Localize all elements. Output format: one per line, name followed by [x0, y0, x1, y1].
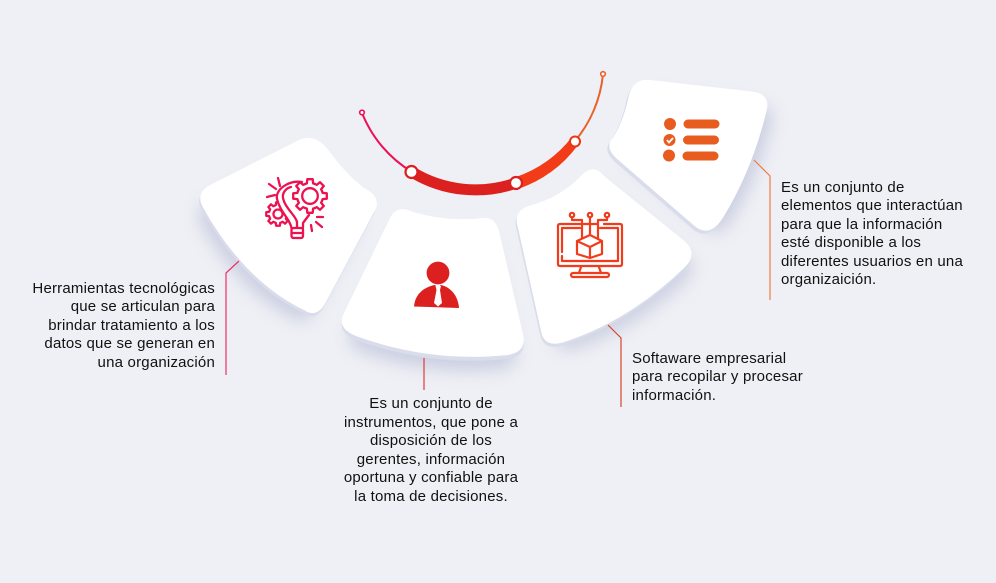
text block: list: elementos que interactúan — [781, 197, 963, 214]
leader line: tools — [226, 261, 239, 375]
icon: monitor with cube — [558, 213, 622, 277]
panel: card list — [607, 80, 772, 234]
text block: person: disposición de los — [370, 432, 492, 449]
text block: software: para recopilar y procesar — [632, 368, 803, 385]
panel: card tools — [198, 138, 377, 321]
text block: tools: que se articulan para — [71, 298, 215, 315]
text block: tools: datos que se generan en — [44, 335, 215, 352]
text block: software: Softaware empresarial — [632, 350, 786, 367]
panel: card software — [516, 169, 693, 351]
text block: software — [632, 350, 803, 404]
icon: person with tie — [414, 262, 459, 308]
text block: person: instrumentos, que pone a — [344, 414, 518, 431]
leader line: list — [754, 160, 770, 300]
text block: list: para que la información — [781, 216, 942, 233]
text block: tools: una organización — [98, 354, 215, 371]
icon: checklist — [663, 118, 720, 162]
panel: card person — [342, 209, 524, 371]
arc timeline — [360, 72, 605, 190]
text block: tools — [32, 280, 215, 371]
text block: tools: Herramientas tecnológicas — [32, 280, 215, 297]
leader line: person — [423, 358, 425, 390]
text block: software: información. — [632, 387, 716, 404]
text block: list: esté disponible a los — [781, 234, 921, 251]
text block: person: Es un conjunto de — [369, 395, 493, 412]
text block: list: diferentes usuarios en una — [781, 253, 963, 270]
leader line: software — [608, 325, 621, 407]
text block: person: oportuna y confiable para — [344, 469, 518, 486]
text block: tools: brindar tratamiento a los — [48, 317, 215, 334]
icon: lightbulb with gears — [266, 178, 327, 238]
text block: person: la toma de decisiones. — [354, 488, 508, 505]
text block: list: Es un conjunto de — [781, 179, 904, 196]
text block: person: gerentes, información — [357, 451, 505, 468]
text block: list — [781, 179, 963, 288]
text block: person — [344, 395, 518, 505]
text block: list: organizaición. — [781, 271, 876, 288]
